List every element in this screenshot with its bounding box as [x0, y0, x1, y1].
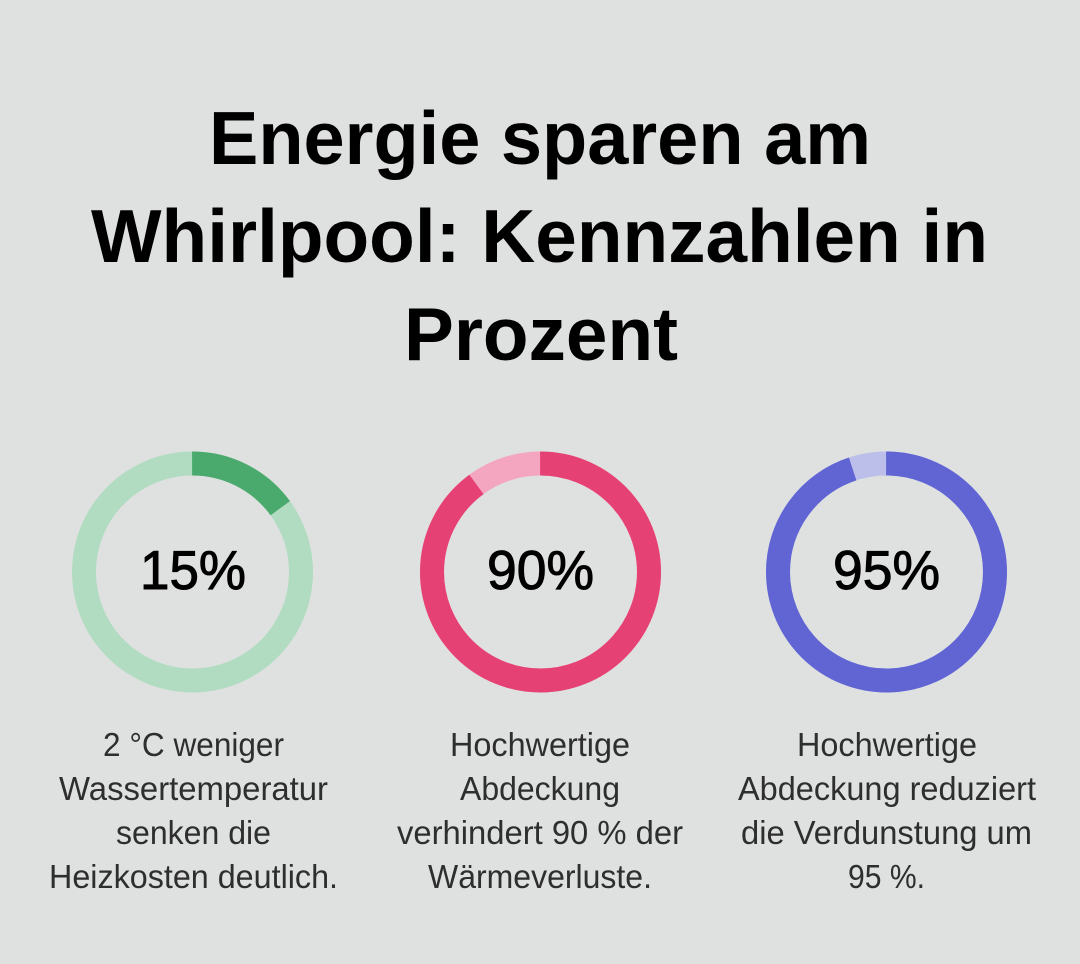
description: heat loss: verhindert 90 % der [397, 814, 683, 851]
donut chart: 15 percent [84, 464, 301, 680]
panel: 15 percent metric [49, 464, 338, 895]
title: Energie sparen am [209, 96, 871, 180]
description: heat loss [397, 726, 683, 895]
panel: 90 percent metric [397, 464, 683, 895]
donut chart: 95 percent [778, 464, 995, 680]
description: heat loss: Abdeckung [460, 770, 620, 807]
value: 90%: 90% [487, 539, 594, 601]
value: 95%: 95% [833, 539, 940, 601]
panel: 95 percent metric [738, 464, 1036, 895]
description: evaporation: Abdeckung reduziert [738, 770, 1036, 807]
description: evaporation: Hochwertige [797, 726, 977, 763]
value: 15%: 15% [140, 539, 246, 601]
description: heat loss: Wärmeverluste. [428, 858, 652, 895]
description: water temperature: Wassertemperatur [59, 770, 328, 807]
title [91, 96, 988, 376]
title: Whirlpool: Kennzahlen in [91, 194, 988, 278]
description: evaporation: die Verdunstung um [741, 814, 1032, 851]
description: water temperature [49, 726, 338, 895]
description: water temperature: Heizkosten deutlich. [49, 858, 338, 895]
title: Prozent [404, 292, 678, 376]
description: evaporation: 95 %. [848, 858, 925, 895]
description: heat loss: Hochwertige [450, 726, 630, 763]
description: water temperature: 2 °C weniger [103, 726, 284, 763]
description: evaporation [738, 726, 1036, 895]
description: water temperature: senken die [116, 814, 271, 851]
donut chart: 90 percent [432, 464, 649, 680]
